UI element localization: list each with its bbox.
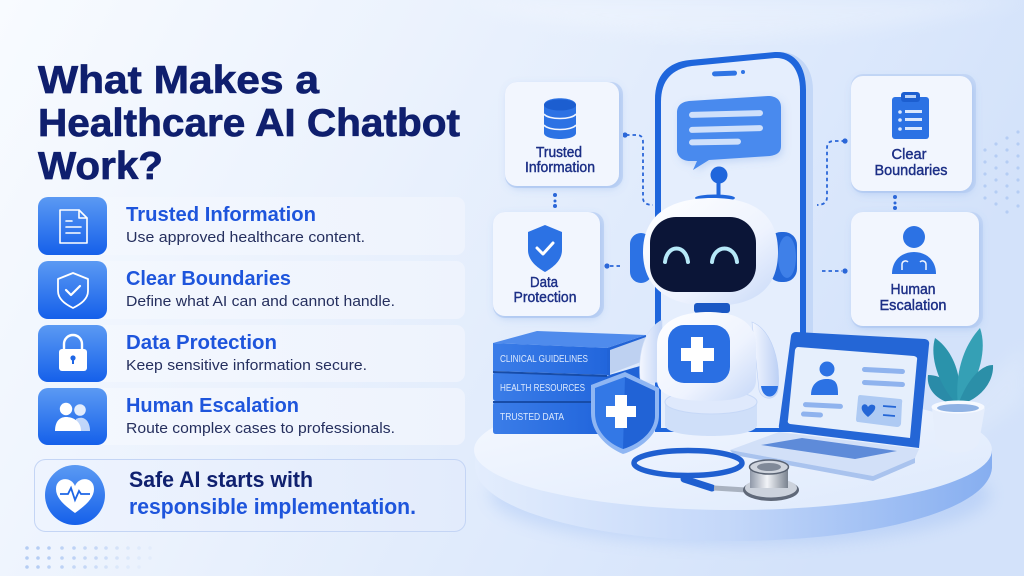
- base: [665, 390, 757, 436]
- book: health resources: HEALTH RESOURCES: [500, 383, 585, 394]
- icon: doctor: [892, 226, 936, 274]
- vitals card: [856, 395, 902, 427]
- icon: padlock: [59, 335, 87, 371]
- book: trusted data: TRUSTED DATA: [500, 412, 564, 423]
- keyboard base: [730, 432, 919, 481]
- book: clinical guidelines: [493, 331, 646, 377]
- card: data protection: [493, 212, 604, 318]
- icon: clipboard: [892, 92, 929, 139]
- face screen: [650, 217, 756, 292]
- title: What Makes a: [38, 59, 320, 102]
- title: Healthcare AI Chatbot: [38, 102, 460, 145]
- feature: clear boundaries: Define what AI can and cannot handle.: [126, 293, 395, 310]
- callout: responsible implementation.: [129, 494, 416, 519]
- feature: clear boundaries: [38, 261, 465, 319]
- icon: people: [55, 403, 90, 431]
- chat bubble: [677, 96, 781, 170]
- head: [643, 198, 778, 306]
- phone: [655, 52, 813, 432]
- feature: data protection: [38, 325, 465, 382]
- book: health resources: [493, 366, 640, 403]
- connectors: [553, 132, 897, 274]
- card: data protection: Protection: [514, 290, 576, 306]
- ears: [630, 232, 797, 283]
- feature: data protection: Data Protection: [126, 332, 277, 354]
- icon: heart pulse: [45, 465, 105, 525]
- feature: trusted information: Use approved healthcare content.: [126, 229, 365, 246]
- panel: feature list: [38, 197, 465, 445]
- callout: Safe AI starts with: [129, 467, 313, 492]
- user icon: [811, 362, 838, 395]
- card: clear boundaries: Clear: [892, 147, 927, 163]
- shield: [591, 372, 659, 454]
- card: human escalation: Escalation: [880, 298, 946, 314]
- feature: trusted information: [38, 197, 465, 255]
- card: trusted information: Trusted: [536, 145, 582, 161]
- title: Work?: [38, 145, 163, 188]
- card: human escalation: [851, 212, 983, 328]
- callout: [34, 460, 466, 532]
- laptop: [730, 332, 929, 481]
- icon: shield check: [528, 225, 562, 272]
- books: [493, 331, 646, 434]
- pot: [932, 400, 985, 452]
- feature: trusted information: Trusted Information: [126, 204, 316, 226]
- card: human escalation: Human: [890, 282, 936, 298]
- book: clinical guidelines: CLINICAL GUIDELINES: [500, 354, 588, 365]
- feature: data protection: Keep sensitive information secure.: [126, 357, 367, 374]
- feature: human escalation: Human Escalation: [126, 395, 299, 417]
- stethoscope: [634, 450, 799, 501]
- title: [38, 59, 460, 188]
- platform: [474, 390, 992, 545]
- feature: human escalation: Route complex cases to professionals.: [126, 420, 395, 437]
- feature: human escalation: [38, 388, 465, 445]
- robot: [630, 166, 797, 436]
- icon: document: [60, 210, 87, 243]
- antenna: [695, 166, 735, 202]
- plant: [928, 328, 993, 452]
- card: trusted information: Information: [525, 160, 595, 176]
- chest badge: [668, 325, 730, 383]
- card: clear boundaries: [851, 74, 976, 193]
- card: data protection: Data: [530, 275, 559, 291]
- icon: shield check: [58, 273, 88, 308]
- torso: [657, 312, 756, 401]
- arms: [640, 320, 779, 398]
- book: trusted data: [493, 402, 600, 434]
- neck: [694, 303, 730, 313]
- screen: [779, 332, 929, 448]
- card: trusted information: [505, 82, 623, 188]
- icon: database: [544, 98, 576, 139]
- card: clear boundaries: Boundaries: [874, 163, 948, 179]
- feature: clear boundaries: Clear Boundaries: [126, 268, 291, 290]
